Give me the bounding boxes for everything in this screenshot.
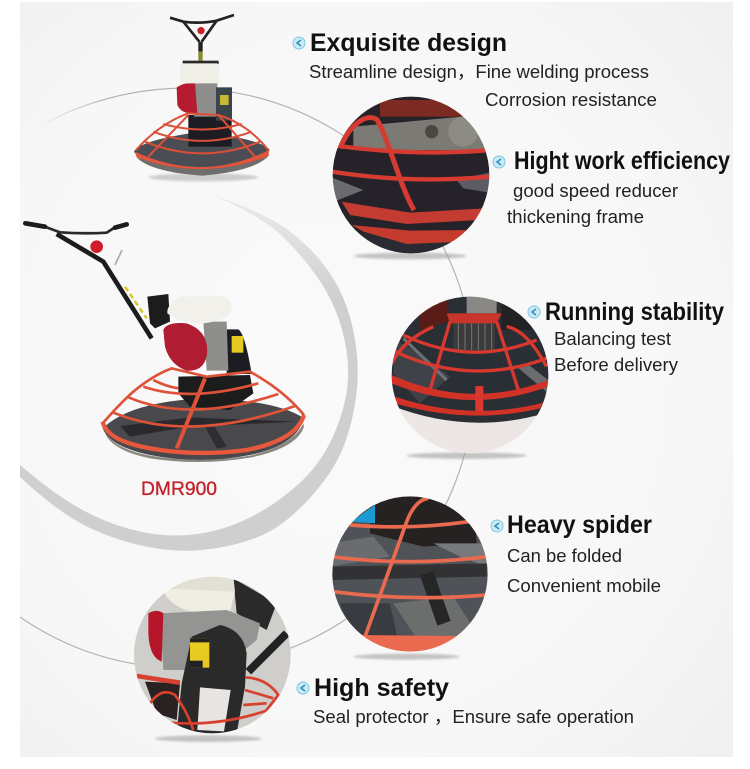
detail photo: gearbox cage <box>390 293 550 459</box>
gearbox <box>188 115 232 147</box>
small machine (front view) <box>134 15 270 181</box>
icon: Hight work efficiency bullet <box>493 156 505 168</box>
detail photo: safety cover <box>133 576 292 742</box>
icon: Running stability bullet <box>528 306 540 318</box>
orange rim and cage <box>103 415 304 453</box>
detail photo: frame <box>330 93 493 259</box>
detail photo: spider frame <box>330 495 490 660</box>
engine block <box>203 322 228 371</box>
heading: High safety: High safety <box>314 674 449 702</box>
gearbox <box>178 375 253 410</box>
disc <box>134 132 270 176</box>
model label: DMR900 <box>141 479 217 500</box>
heading: Running stability: Running stability <box>545 298 724 326</box>
text: good speed reducer: good speed reducer <box>513 181 678 201</box>
heading: Exquisite design: Exquisite design <box>310 29 507 57</box>
text: Before delivery: Before delivery <box>554 355 678 375</box>
belt cover <box>227 329 252 374</box>
text: Corrosion resistance: Corrosion resistance <box>485 90 657 110</box>
icon: Exquisite design bullet <box>293 37 305 49</box>
text: thickening frame: thickening frame <box>507 207 644 227</box>
text: Convenient mobile: Convenient mobile <box>507 576 661 596</box>
connecting arc <box>20 88 475 668</box>
main machine handle <box>25 223 152 338</box>
text: Can be folded: Can be folded <box>507 546 622 566</box>
heading: Heavy spider: Heavy spider <box>507 511 652 539</box>
icon: Heavy spider bullet <box>491 520 503 532</box>
text: Streamline design: Streamline design，Fine welding process <box>309 62 649 82</box>
main machine DMR900 <box>103 294 304 462</box>
trowel disc <box>103 398 304 460</box>
engine <box>194 82 217 117</box>
text: Balancing test: Balancing test <box>554 329 671 349</box>
icon: High safety bullet <box>297 682 309 694</box>
cage <box>136 113 268 157</box>
handle <box>170 15 234 42</box>
text: Seal protector, Ensure safe operation: Seal protector ，Ensure safe operation <box>313 707 634 727</box>
large crescent ring behind main machine <box>20 195 358 551</box>
